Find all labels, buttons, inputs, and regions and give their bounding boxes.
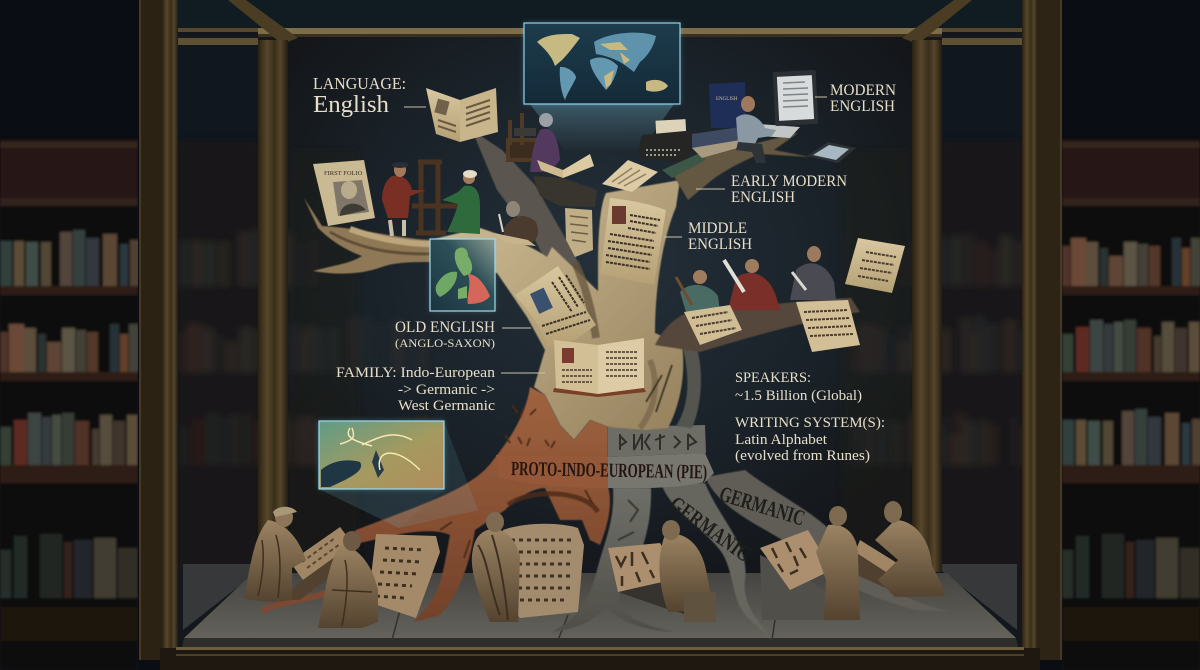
text: language family: [336, 365, 496, 414]
icon: small tablet: [807, 142, 856, 163]
text: language family: West Germanic: [398, 398, 495, 414]
text: language title: LANGUAGE:: [313, 74, 406, 93]
icon: first folio portrait book: [313, 160, 375, 226]
text: writing systems: (evolved from Runes): [735, 448, 870, 464]
text: Modern English: ENGLISH: [830, 98, 895, 115]
icon: first folio portrait book: FIRST FOLIO: [324, 170, 363, 177]
icon: monk writing: [494, 201, 538, 246]
text: writing systems: WRITING SYSTEM(S):: [735, 415, 885, 431]
icon: parchment tree trunk: [430, 180, 701, 440]
icon: standing scribe 3: [472, 512, 520, 622]
icon: Tudor man in red: [382, 162, 426, 236]
text: Germanic carved label on root 1: GERMANIC: [665, 491, 756, 566]
text: Middle English: [688, 220, 752, 253]
icon: kneeling scribe 1: [244, 507, 306, 602]
icon: blue dictionary and book stack: ENGLISH: [716, 97, 738, 102]
icon: terracotta roots (Proto-Indo-European): [264, 387, 610, 622]
icon: large tablet: [773, 70, 818, 126]
panel: lower frame rail: [160, 647, 1040, 670]
text: Modern English: MODERN: [830, 82, 896, 99]
icon: upper right branch: [672, 133, 810, 200]
icon: tablet 4: [608, 543, 714, 622]
text: Early Modern English: [731, 173, 847, 206]
text: Middle English: MIDDLE: [688, 220, 747, 237]
text: writing systems: Latin Alphabet: [735, 432, 828, 448]
text: Old English: (ANGLO-SAXON): [395, 336, 495, 350]
icon: illuminated page on right branch: [845, 238, 905, 293]
icon: illuminated open book on trunk: [553, 338, 646, 397]
icon: world map hologram: [524, 23, 680, 152]
text: language title: English: [313, 92, 389, 118]
icon: right branch with scribes: [655, 298, 860, 352]
panel: display case interior: [178, 0, 1040, 650]
icon: modern person with laptop: [736, 96, 800, 163]
text: Middle English: ENGLISH: [688, 236, 752, 253]
text: language family: -> Germanic ->: [398, 382, 495, 398]
icon: kneeling scribe 6: [875, 501, 945, 597]
icon: British Isles map hologram: [430, 239, 495, 311]
panel: gold display case frame: [139, 0, 1062, 660]
panel: stone plinth: [182, 573, 1018, 648]
icon: Old English manuscript: [515, 266, 596, 346]
text: language title: [313, 74, 406, 118]
icon: woman in green: [442, 170, 480, 234]
leader lines: [404, 97, 827, 373]
icon: wooden printing press: [412, 162, 470, 233]
icon: typewriter: [638, 119, 706, 178]
text: language family: FAMILY: Indo-European: [336, 365, 496, 381]
icon: tablet 6: [850, 540, 905, 590]
icon: rune carved stone band: [608, 425, 706, 457]
icon: wooden press and purple printer: [508, 113, 560, 172]
text: speakers: [735, 370, 862, 404]
icon: left branch: [304, 198, 432, 274]
icon: terracotta and stone PIE band: [496, 453, 714, 488]
text: writing systems: [735, 415, 885, 464]
text: Proto-Indo-European carved label: PROTO-INDO-EUROPEAN (PIE): [511, 458, 707, 483]
icon: grey stone roots (Germanic): [552, 470, 950, 640]
panel: left bookshelf: [0, 138, 140, 670]
icon: blue dictionary and book stack: [692, 82, 746, 158]
icon: open book on the right limb: [602, 160, 658, 192]
text: Modern English: [830, 82, 896, 115]
text: speakers: SPEAKERS:: [735, 370, 811, 386]
icon: top-left open book: [426, 88, 498, 142]
icon: tablet 3: [503, 524, 584, 618]
text: Early Modern English: EARLY MODERN: [731, 173, 847, 190]
icon: middle grey branch: [472, 130, 596, 340]
panel: right bookshelf: [1062, 138, 1200, 670]
icon: tablet 1: [280, 527, 353, 600]
text: speakers: ~1.5 Billion (Global): [735, 388, 862, 404]
text: Early Modern English: ENGLISH: [731, 189, 795, 206]
text: Germanic carved label on root 2: GERMANIC: [717, 481, 808, 531]
icon: tablet 2: [368, 534, 440, 618]
text: Old English: OLD ENGLISH: [395, 319, 495, 336]
icon: tablet 5 with stone plinth: [760, 530, 832, 620]
icon: seated scribe 4: [659, 520, 716, 622]
icon: Middle English manuscript: [600, 198, 666, 285]
icon: kneeling scribe 2: [318, 531, 378, 628]
icon: open and closed books on the middle branch: [533, 154, 597, 257]
icon: scribes on right branch: [676, 246, 836, 312]
icon: migration map hologram: [319, 421, 478, 528]
text: Old English: [395, 319, 495, 350]
icon: standing scribe 5: [816, 506, 860, 620]
icon: unrolled scrolls: [684, 300, 860, 352]
